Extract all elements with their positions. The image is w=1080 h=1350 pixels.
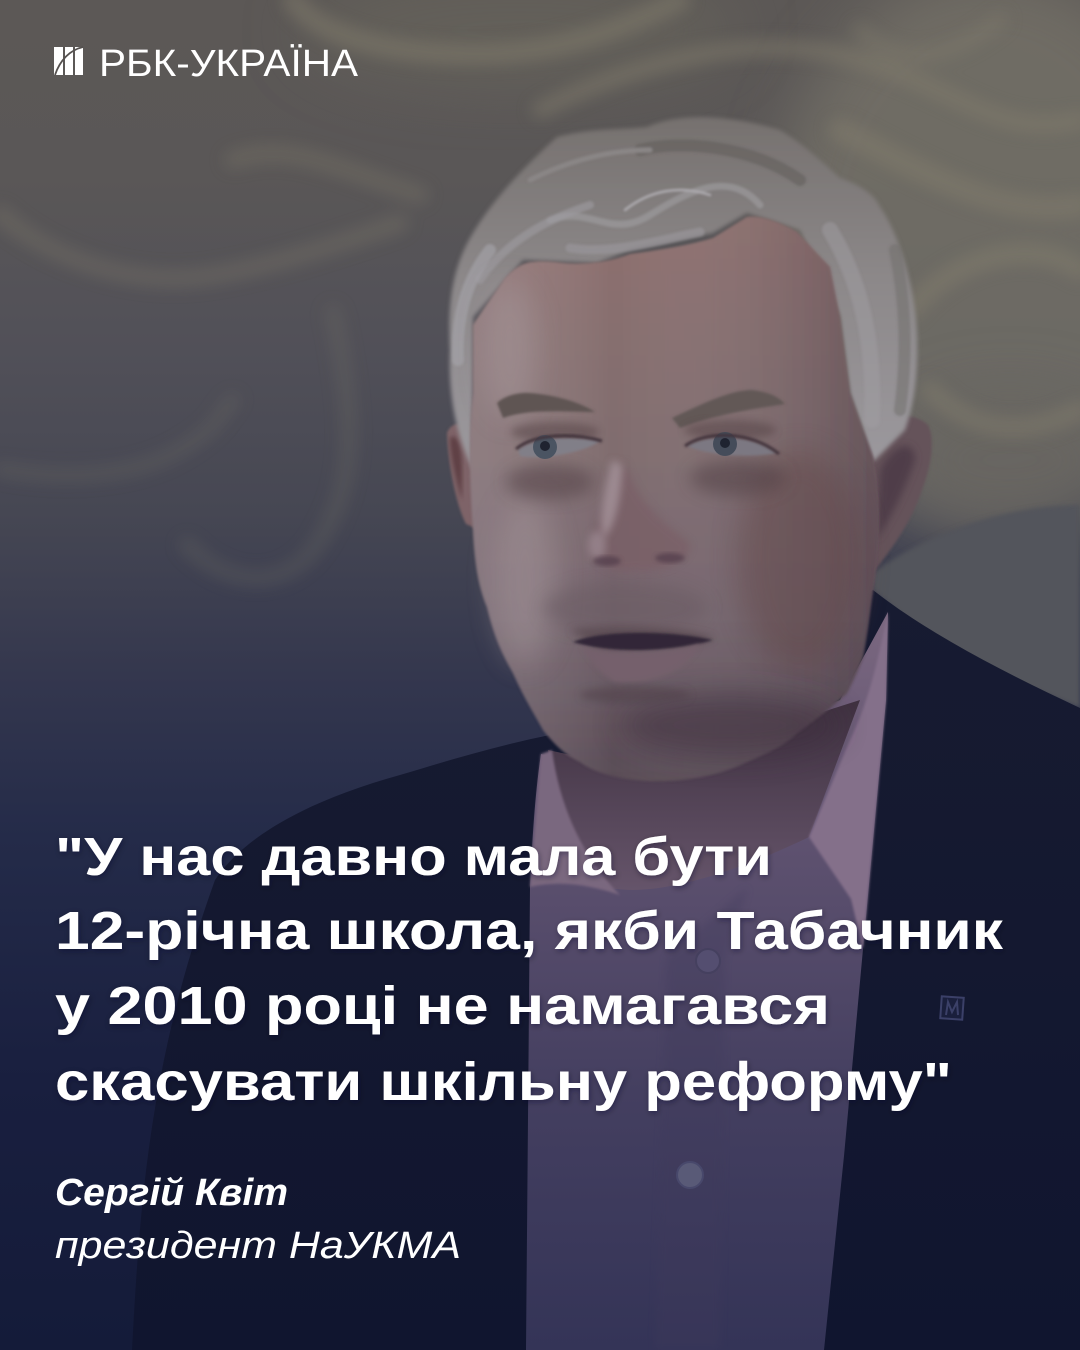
face [470,217,879,781]
shirt button lower [677,1162,703,1188]
mouth [570,627,715,704]
nose [588,460,690,571]
stubble area [543,582,707,634]
logo [54,43,359,85]
hair mass [449,117,917,470]
logo mark [54,47,83,75]
portrait head [447,117,932,781]
forehead highlight [484,280,536,420]
logo wordmark: РБК-УКРАЇНА [99,43,359,85]
right ear [865,416,932,574]
placket [655,887,748,1350]
armchair behind shoulder [870,505,1080,708]
lapel pin [940,996,964,1020]
decorative golden ornament on wall [0,0,1080,578]
speaker attribution: Сергій Квіт [55,1172,288,1214]
quote heading: "У нас давно мала бути [55,827,772,887]
cheek highlight [495,495,555,665]
speaker attribution: президент НаУКМА [55,1225,461,1267]
right collar [809,612,888,949]
neck [548,700,860,890]
left ear [447,424,480,530]
shirt button upper [696,949,720,973]
left collar [530,750,620,895]
eyebrows [497,393,595,418]
warm cheek shade [738,450,862,670]
jacket [132,590,1080,1350]
quote heading [55,827,1004,1112]
eye sockets [506,464,594,500]
hair strands [458,145,905,420]
shirt and collar [526,612,888,1350]
speaker attribution [55,1172,461,1267]
jaw shadow [620,693,840,757]
quote heading: скасувати шкільну реформу" [55,1052,952,1112]
left eye [516,435,602,459]
right eye [685,432,779,456]
quote heading: у 2010 році не намагався [55,976,830,1036]
quote heading: 12-річна школа, якби Табачник [55,901,1004,961]
